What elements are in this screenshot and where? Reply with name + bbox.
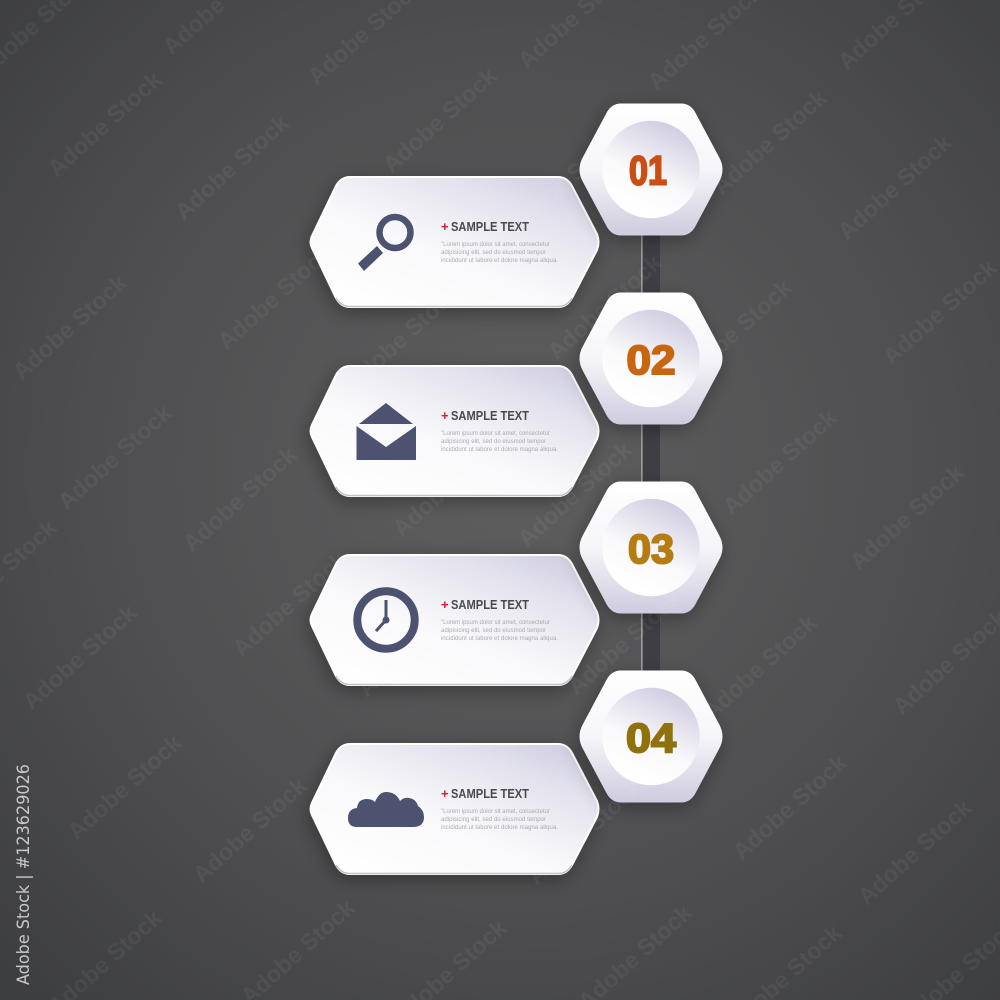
panel: step 2 banner — [310, 366, 598, 496]
watermarks: Adobe Stock — [563, 584, 687, 700]
text block: step 1: adipisicing elit, sed do eiusmod tempor — [441, 250, 546, 256]
panel: step 3 banner — [310, 555, 598, 685]
watermarks: Adobe Stock — [878, 254, 1000, 370]
watermarks: Adobe Stock — [353, 586, 477, 702]
icon: cloud — [348, 792, 424, 827]
watermarks: Adobe Stock — [403, 736, 527, 852]
text block: step 3: "Lorem ipsum dolor sit amet, consectetur — [441, 620, 550, 626]
watermarks: Adobe Stock — [341, 279, 465, 395]
watermarks: Adobe Stock — [718, 404, 842, 520]
watermarks: Adobe Stock — [708, 84, 832, 200]
number 02: 02 — [626, 337, 676, 383]
watermarks: Adobe Stock — [188, 772, 312, 888]
text block: step 2: "Lorem ipsum dolor sit amet, consectetur — [441, 431, 550, 437]
text block: step 3: incididunt ut labore et dolore magna aliqua. — [441, 636, 558, 642]
text block: step 4: "Lorem ipsum dolor sit amet, consectetur — [441, 809, 550, 815]
heading: step 4: + — [441, 786, 449, 801]
heading: step 3: SAMPLE TEXT — [451, 597, 529, 612]
step 2 hexagon — [580, 292, 722, 424]
watermarks: Adobe Stock — [543, 249, 667, 365]
icon: magnifying glass — [358, 217, 410, 271]
watermarks: Adobe Stock — [728, 749, 852, 865]
text block: step 2 — [441, 431, 558, 453]
heading: step 2: SAMPLE TEXT — [451, 408, 529, 423]
heading: step 2: + — [441, 408, 449, 423]
watermarks: Adobe Stock — [503, 124, 627, 240]
heading: step 3: + — [441, 597, 449, 612]
heading: step 4: SAMPLE TEXT — [451, 786, 529, 801]
watermarks: Adobe Stock — [18, 599, 142, 715]
watermarks: Adobe Stock — [698, 609, 822, 725]
icon: clock — [357, 591, 415, 649]
timeline connector — [641, 200, 660, 720]
step 4 hexagon — [580, 670, 722, 802]
heading: step 1: + — [441, 219, 449, 234]
panel: step 4 banner — [310, 744, 598, 874]
icon: envelope — [356, 403, 416, 460]
stock id label: Adobe Stock | #123629026 — [14, 764, 34, 985]
watermarks: Adobe Stock — [53, 399, 177, 515]
watermarks: Adobe Stock — [523, 774, 647, 890]
watermarks: Adobe Stock — [170, 109, 294, 225]
watermarks: Adobe Stock — [378, 62, 502, 178]
text block: step 2: incididunt ut labore et dolore magna aliqua. — [441, 447, 558, 453]
watermarks: Adobe Stock — [513, 436, 637, 552]
step 3 hexagon — [580, 482, 722, 614]
watermarks: Adobe Stock — [8, 269, 132, 385]
panel: step 1 banner — [310, 177, 598, 307]
text block: step 4: incididunt ut labore et dolore magna aliqua. — [441, 825, 558, 831]
text block: step 2: adipisicing elit, sed do eiusmod tempor — [441, 439, 546, 445]
text block: step 3 — [441, 620, 558, 642]
heading: step 1: SAMPLE TEXT — [451, 219, 529, 234]
text block: step 1: incididunt ut labore et dolore magna aliqua. — [441, 258, 558, 264]
watermarks: Adobe Stock — [388, 426, 512, 542]
number 03: 03 — [628, 526, 674, 572]
watermarks: Adobe Stock — [673, 274, 797, 390]
text block: step 1: "Lorem ipsum dolor sit amet, consectetur — [441, 242, 550, 248]
step 1 hexagon — [580, 104, 722, 236]
watermarks: Adobe Stock — [178, 441, 302, 557]
text block: step 3: adipisicing elit, sed do eiusmod tempor — [441, 628, 546, 634]
watermarks: Adobe Stock — [63, 729, 187, 845]
text block: step 4 — [441, 809, 558, 831]
watermarks: Adobe Stock — [853, 794, 977, 910]
watermarks: Adobe Stock — [213, 239, 337, 355]
watermarks: Adobe Stock — [845, 459, 969, 575]
watermarks: Adobe Stock — [833, 129, 957, 245]
watermarks: Adobe Stock — [228, 546, 352, 662]
watermarks: Adobe Stock — [43, 66, 167, 182]
number 04: 04 — [626, 715, 676, 761]
number 01: 01 — [629, 148, 667, 194]
text block: step 1 — [441, 242, 558, 264]
text block: step 4: adipisicing elit, sed do eiusmod tempor — [441, 817, 546, 823]
